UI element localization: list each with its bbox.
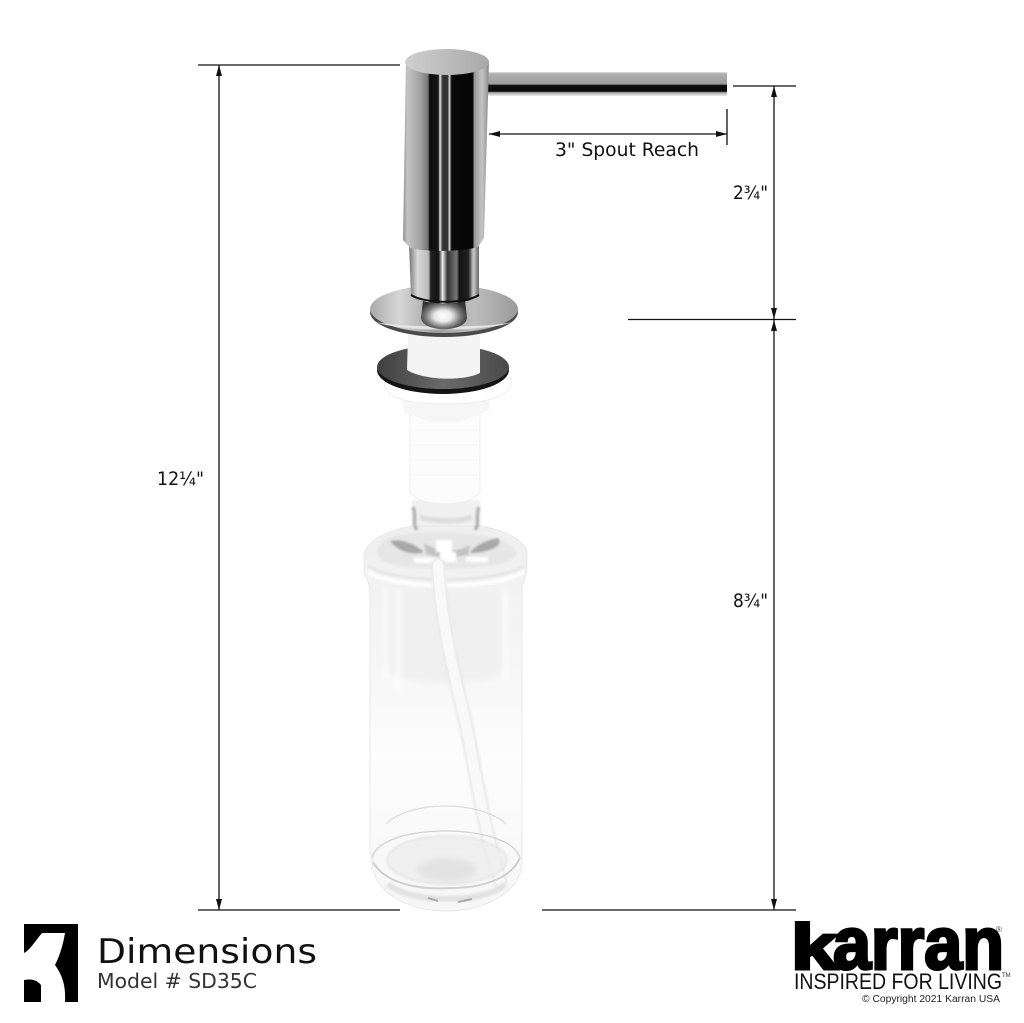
text: model number: Model # SD35C [97,969,257,993]
bottle neck [411,500,481,532]
heading: Dimensions: Dimensions [97,932,317,972]
logo: Karran: k [791,911,838,983]
logo: Karran: arran [833,902,1004,985]
white collar [385,378,511,404]
head top cap [405,49,489,75]
bottle base rings [372,806,520,902]
dimension: upper height 2¾ inches: 2¾" [733,182,768,204]
dimension: lower height 8¾ inches: 8¾" [733,590,768,612]
trademark: TM [1002,973,1011,979]
hex nut [399,392,491,422]
head body [403,62,489,251]
bottle wall shading [380,590,508,690]
copyright: © Copyright 2021 Karran USA [862,994,1000,1005]
logo: Karran: ® [996,925,1002,934]
dimension: upper height 2¾ inches [628,86,796,320]
logo tagline: INSPIRED FOR LIVING [794,969,1002,994]
pump head [403,49,727,251]
dimension: overall height 12¼ inches: 12¼" [157,468,204,490]
dimension: overall height 12¼ inches [157,65,400,910]
bottle [364,500,527,911]
threaded mounting shank [385,378,511,504]
bottle shoulder shading [368,507,524,586]
white upper shank [407,335,480,379]
black washer [377,345,509,394]
dip tube [438,565,500,880]
icon: Karran R mark [24,924,78,1002]
dimension: spout reach: 3" Spout Reach [555,139,699,161]
bottle body [364,526,527,911]
pump neck and ferrule [409,245,479,329]
spout [484,72,727,96]
chrome flange [370,285,518,337]
